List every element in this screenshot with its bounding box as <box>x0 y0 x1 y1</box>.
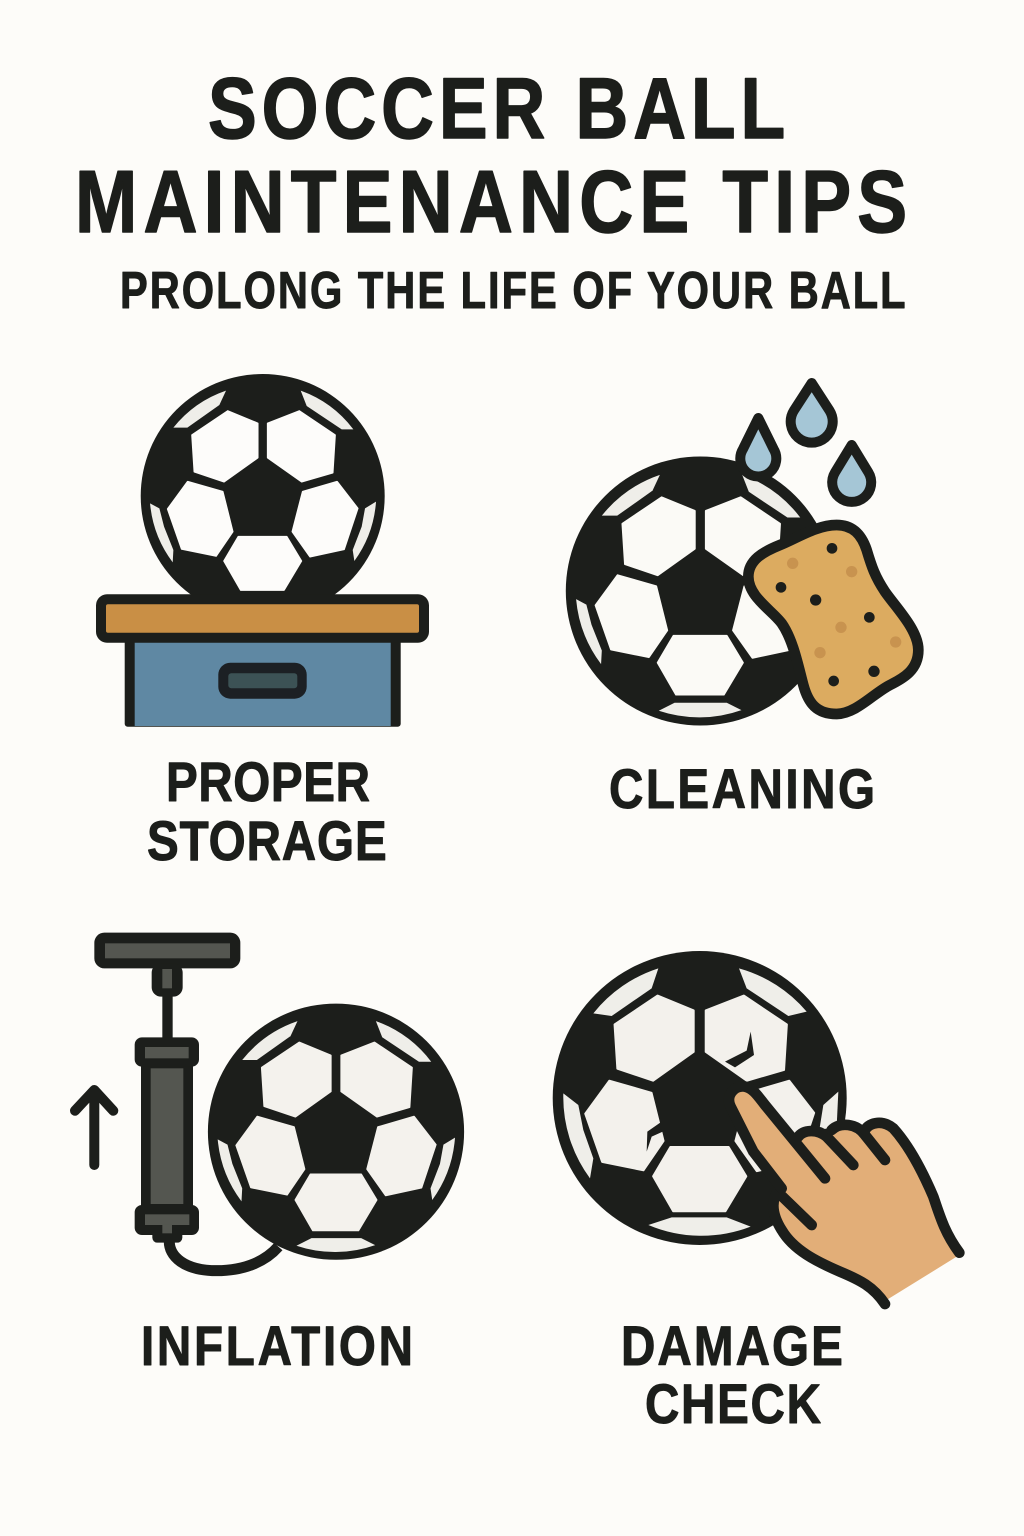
label: inflation: INFLATION <box>141 1315 413 1378</box>
label: damage check <box>621 1315 843 1436</box>
label: proper storage: STORAGE <box>147 810 387 873</box>
panel: proper storage <box>96 374 429 873</box>
label: damage check: CHECK <box>645 1373 821 1436</box>
icon: ball with sponge and water drops <box>566 383 918 726</box>
title: MAINTENANCE TIPS <box>75 153 907 251</box>
subtitle: PROLONG THE LIFE OF YOUR BALL <box>120 261 906 319</box>
label: cleaning: CLEANING <box>609 758 875 821</box>
title: SOCCER BALL <box>208 60 785 156</box>
panel: cleaning <box>566 383 918 821</box>
icon: soccer ball on drawer <box>96 374 429 727</box>
icon: hand pump with hose and ball <box>94 933 464 1271</box>
panel: inflation <box>75 933 464 1378</box>
title <box>75 60 907 251</box>
label: proper storage <box>147 751 387 873</box>
panel: damage check <box>553 951 959 1436</box>
label: damage check: DAMAGE <box>621 1315 843 1378</box>
label: proper storage: PROPER <box>166 751 370 814</box>
icon: ball with cracks and pointing hand <box>553 951 959 1304</box>
arrow: pump upward <box>75 1090 113 1165</box>
